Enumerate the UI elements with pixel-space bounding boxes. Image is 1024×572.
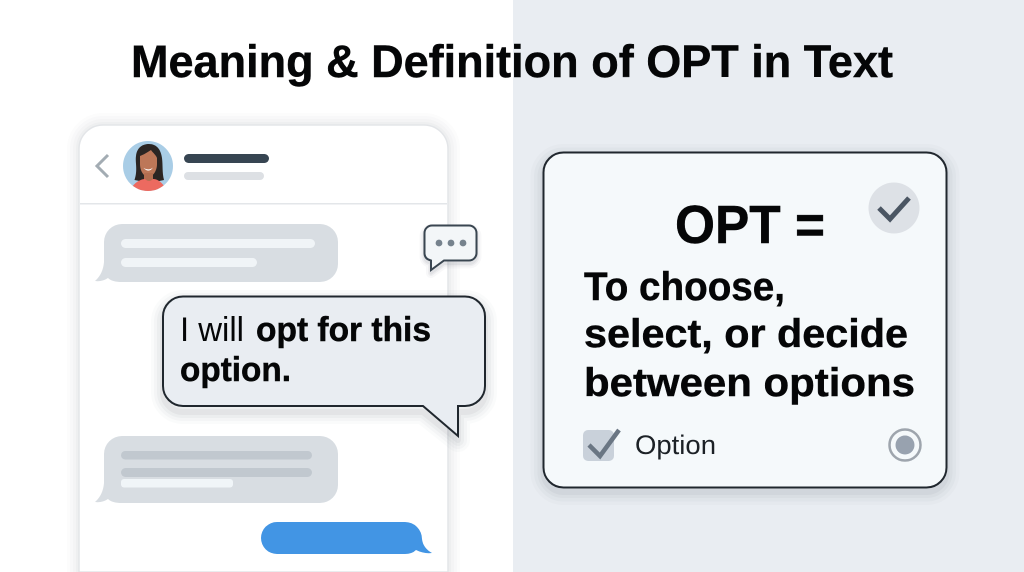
icon: avatar <box>123 141 173 193</box>
callout text line 1: I will <box>180 311 244 349</box>
icon: radio button <box>890 430 920 460</box>
incoming bubble 2 <box>95 436 338 503</box>
icon: check badge <box>868 182 920 234</box>
header divider <box>80 203 447 204</box>
callout text line 2: option. <box>180 351 291 389</box>
incoming bubble 1 <box>95 224 338 282</box>
contact status line <box>184 172 264 180</box>
definition text <box>584 265 915 405</box>
definition text: select, or decide <box>584 312 908 356</box>
icon: back chevron <box>97 155 108 177</box>
panel: phone chat <box>79 125 448 572</box>
icon: checkbox <box>583 430 619 461</box>
icon: typing bubble <box>424 226 476 273</box>
title: Meaning & Definition of OPT in Text <box>131 36 893 87</box>
heading: OPT =: OPT = <box>675 195 825 255</box>
option label: Option <box>635 430 716 460</box>
phone body <box>79 125 448 572</box>
right background panel <box>513 0 1024 572</box>
callout: example sentence <box>163 296 485 440</box>
card body <box>544 152 946 488</box>
outgoing blue bubble <box>261 522 432 554</box>
contact name line <box>184 154 269 163</box>
panel: definition card <box>544 152 946 492</box>
definition text: To choose, <box>584 265 785 309</box>
definition text: between options <box>584 361 915 405</box>
callout bold phrase: opt for this <box>256 311 431 349</box>
